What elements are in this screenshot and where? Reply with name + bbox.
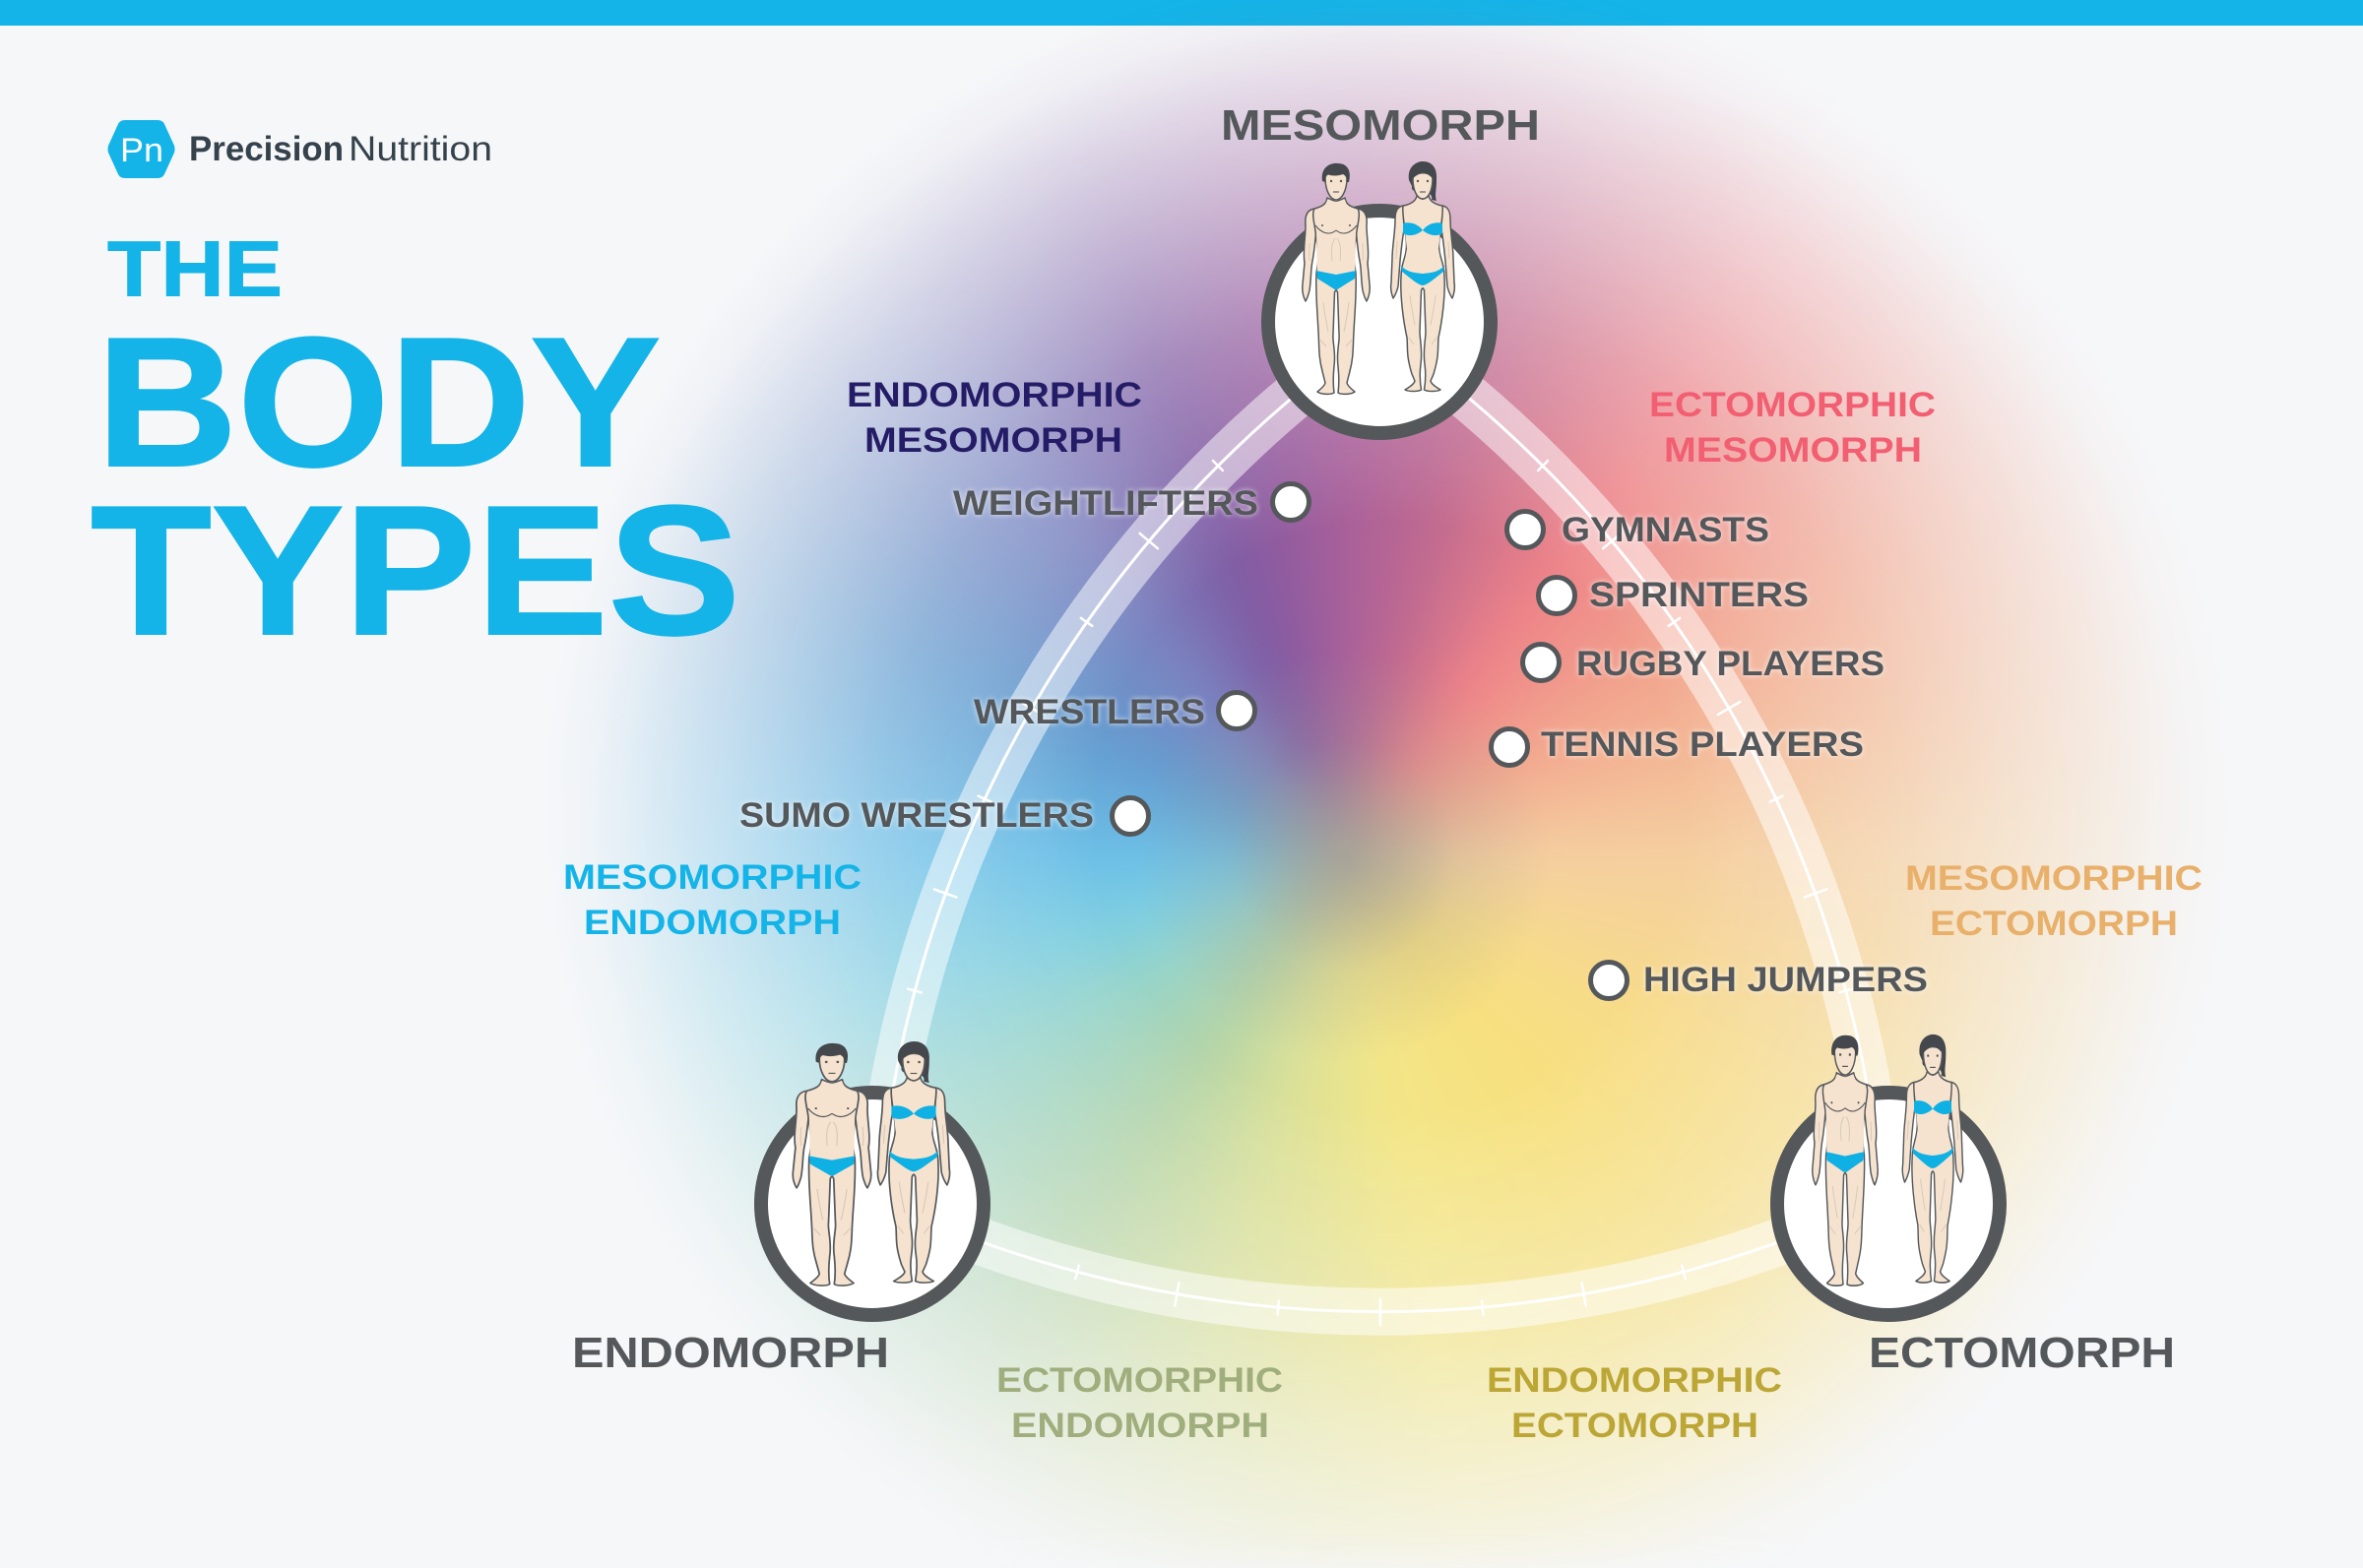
top bar bbox=[0, 0, 2363, 26]
triangle arc: endomorph to ectomorph bbox=[872, 1196, 1888, 1325]
label: endomorphic mesomorph: ENDOMORPHIC bbox=[847, 376, 1142, 414]
label: ectomorphic mesomorph: ECTOMORPHIC bbox=[1649, 386, 1936, 424]
label: endomorphic ectomorph bbox=[1487, 1361, 1782, 1445]
label: ectomorphic endomorph bbox=[996, 1361, 1283, 1445]
logo hexagon icon: Pn bbox=[120, 132, 163, 169]
triangle arc: mesomorph to ectomorph bbox=[1374, 262, 1994, 1206]
label: mesomorphic ectomorph: ECTOMORPH bbox=[1930, 905, 2178, 943]
label: endomorphic mesomorph bbox=[847, 376, 1142, 460]
title line: THE: THE bbox=[107, 224, 283, 313]
marker: tennis players: TENNIS PLAYERS bbox=[1541, 725, 1864, 764]
label: ectomorphic endomorph: ECTOMORPHIC bbox=[996, 1361, 1283, 1400]
heading: mesomorph: MESOMORPH bbox=[1221, 101, 1540, 150]
figure: endomorph woman bbox=[877, 1041, 950, 1283]
endomorph circle bbox=[761, 1093, 984, 1315]
label: ectomorphic endomorph: ENDOMORPH bbox=[1011, 1407, 1269, 1445]
marker: gymnasts: GYMNASTS bbox=[1562, 511, 1769, 549]
logo hexagon icon bbox=[108, 120, 175, 178]
logo wordmark: Nutrition bbox=[349, 130, 492, 168]
label: ectomorphic mesomorph: MESOMORPH bbox=[1664, 431, 1922, 470]
triangle arc: mesomorph to endomorph bbox=[767, 262, 1386, 1206]
mesomorph circle bbox=[1268, 211, 1491, 433]
marker: rugby players: RUGBY PLAYERS bbox=[1576, 645, 1884, 683]
logo: Precision Nutrition bbox=[108, 120, 492, 178]
label: ectomorphic mesomorph bbox=[1649, 386, 1936, 470]
label: mesomorphic endomorph bbox=[563, 858, 862, 942]
heading: ectomorph: ECTOMORPH bbox=[1869, 1329, 2175, 1377]
heading: endomorph: ENDOMORPH bbox=[572, 1329, 889, 1377]
label: endomorphic mesomorph: MESOMORPH bbox=[864, 421, 1122, 460]
title line: TYPES: TYPES bbox=[91, 468, 740, 673]
title bbox=[91, 224, 740, 673]
ectomorph circle bbox=[1777, 1093, 2000, 1315]
label: endomorphic ectomorph: ENDOMORPHIC bbox=[1487, 1361, 1782, 1400]
figure: ectomorph man bbox=[1813, 1035, 1878, 1286]
figure: endomorph man bbox=[793, 1043, 871, 1286]
marker: weightlifters: WEIGHTLIFTERS bbox=[953, 484, 1258, 523]
label: mesomorphic endomorph: MESOMORPHIC bbox=[563, 858, 862, 897]
title line: BODY: BODY bbox=[96, 299, 661, 505]
logo wordmark: Precision bbox=[189, 130, 344, 168]
marker: sprinters: SPRINTERS bbox=[1589, 576, 1809, 614]
marker: wrestlers: WRESTLERS bbox=[974, 693, 1205, 731]
marker: sumo wrestlers: SUMO WRESTLERS bbox=[739, 796, 1094, 835]
figure: mesomorph woman bbox=[1391, 161, 1454, 392]
colour gradient field bbox=[593, 26, 2170, 1568]
figure: mesomorph man bbox=[1303, 163, 1370, 394]
label: mesomorphic endomorph: ENDOMORPH bbox=[584, 904, 841, 942]
label: mesomorphic ectomorph bbox=[1905, 859, 2203, 943]
label: endomorphic ectomorph: ECTOMORPH bbox=[1511, 1407, 1758, 1445]
label: mesomorphic ectomorph: MESOMORPHIC bbox=[1905, 859, 2203, 898]
figure: ectomorph woman bbox=[1902, 1035, 1963, 1283]
marker: high jumpers: HIGH JUMPERS bbox=[1643, 961, 1928, 999]
